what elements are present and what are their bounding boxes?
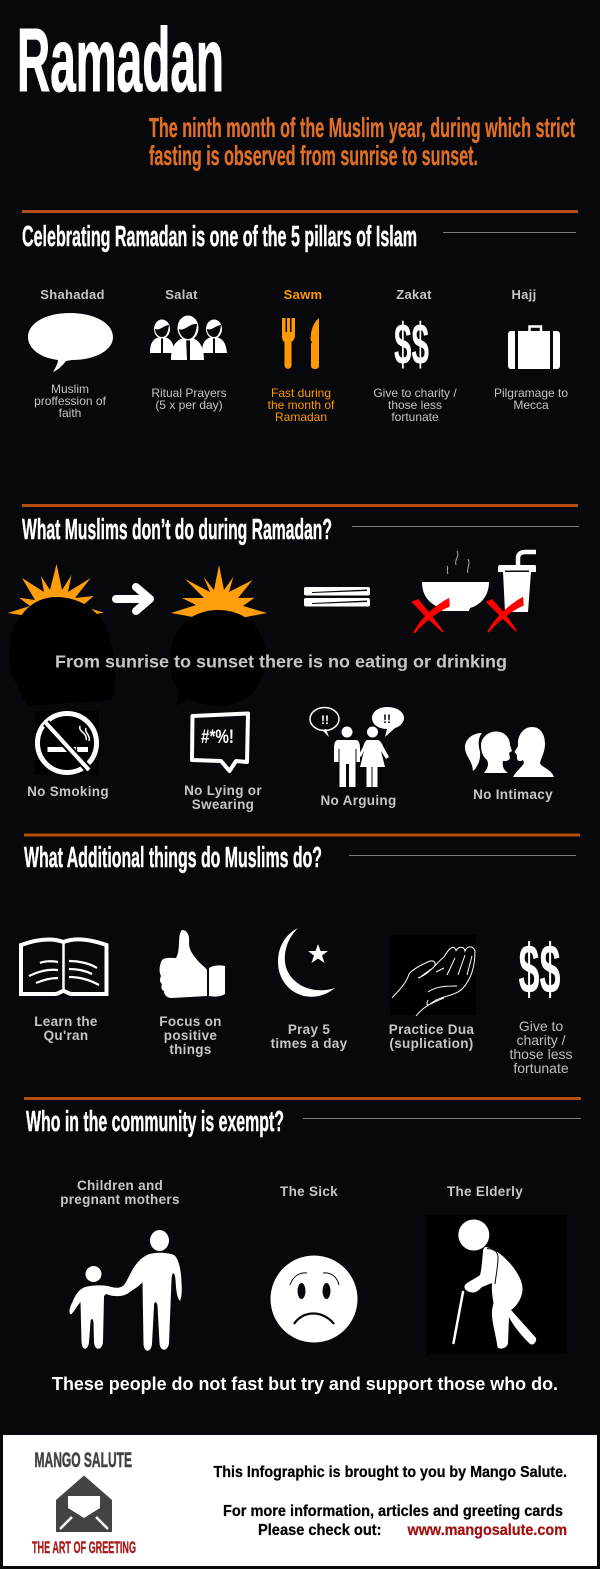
item: practice Dua <box>389 935 476 1051</box>
pillar: Zakat <box>373 287 457 424</box>
item: give to charity: charity / <box>516 1032 566 1048</box>
item: learn the Qu'ran: Learn the <box>34 1014 98 1029</box>
icon: envelope <box>56 1476 112 1532</box>
item: no lying or swearing: Swearing <box>192 797 254 812</box>
icon: speech bubble <box>28 313 113 372</box>
pillar: Salat: Salat <box>165 287 198 302</box>
logo: Mango Salute <box>32 1449 136 1557</box>
icon: dollar signs: $$ <box>394 312 429 377</box>
item: focus on positive things: Focus on <box>159 1014 222 1029</box>
icon: crescent and star <box>278 928 335 997</box>
arrow <box>116 587 150 611</box>
pillar: Zakat: Give to charity / <box>373 386 457 400</box>
item: no intimacy: No Intimacy <box>473 787 553 802</box>
heading: exempt: Who in the community is exempt? <box>26 1106 284 1138</box>
item: learn the Qu'ran <box>21 939 106 1043</box>
item: give to charity: Give to <box>519 1018 563 1034</box>
icon: rising sun <box>8 564 116 706</box>
item: focus on positive things: things <box>169 1042 212 1057</box>
icon: thumbs up <box>160 930 225 998</box>
pillar: Sawm: Sawm <box>284 287 322 302</box>
icon: crossed-out food bowl <box>412 551 489 633</box>
footer message: For more information, articles and greeting cards <box>223 1503 563 1520</box>
pillar: Sawm: the month of <box>268 398 335 412</box>
item: pray 5 times a day <box>271 928 348 1051</box>
caption: exempt support: These people do not fast but try and support those who do. <box>52 1374 558 1394</box>
item: give to charity: fortunate <box>513 1060 569 1076</box>
icon: fork and knife <box>282 318 319 369</box>
pillar: Sawm <box>268 287 335 424</box>
caption: no eating or drinking: From sunrise to sunset there is no eating or drinking <box>55 652 507 672</box>
pillar: Salat <box>150 287 227 412</box>
icon: open book <box>21 939 106 994</box>
pillar: Hajj: Mecca <box>513 398 549 412</box>
item: the elderly <box>426 1184 567 1354</box>
pillar: Shahadad: Muslim <box>51 382 89 396</box>
pillar: Zakat: those less <box>388 398 442 412</box>
item: no arguing <box>310 707 404 808</box>
panel: footer <box>3 1435 597 1566</box>
icon: equals sign <box>304 587 370 606</box>
pillar: Sawm: Fast during <box>271 386 331 400</box>
pillar: Shahadad: faith <box>59 406 81 420</box>
item: children and pregnant mothers <box>60 1178 182 1351</box>
item: pray 5 times a day: times a day <box>271 1036 348 1051</box>
logo: Mango Salute: THE ART OF GREETING <box>32 1538 136 1557</box>
item: no smoking: No Smoking <box>27 784 109 799</box>
item: the sick: The Sick <box>280 1184 338 1199</box>
item: pray 5 times a day: Pray 5 <box>288 1022 330 1037</box>
icon: no smoking sign <box>35 711 99 775</box>
pillar: Zakat: Zakat <box>396 287 432 302</box>
icon: praying hands line drawing <box>390 935 476 1016</box>
pillar: Shahadad: proffession of <box>34 394 107 408</box>
pillar: Salat: (5 x per day) <box>155 398 223 412</box>
pillar: Hajj: Hajj <box>511 287 537 302</box>
icon: suitcase <box>508 326 560 369</box>
title: Ramadan <box>17 11 224 111</box>
title block <box>17 11 575 171</box>
item: no intimacy <box>465 727 554 802</box>
item: no smoking <box>27 711 109 799</box>
icon: adult and child <box>69 1230 182 1351</box>
item: the sick <box>270 1184 358 1342</box>
item: children and pregnant mothers: Children and <box>77 1178 163 1193</box>
panel: who is exempt <box>24 1097 581 1394</box>
icon: praying people <box>150 316 227 360</box>
panel: what Muslims don't do <box>8 504 579 812</box>
pillar: Shahadad: Shahadad <box>40 287 105 302</box>
item: children and pregnant mothers: pregnant mothers <box>60 1192 180 1207</box>
pillar: Sawm: Ramadan <box>275 410 327 424</box>
icon: swearing speech box: #*%! <box>201 727 234 748</box>
pillar: Zakat: fortunate <box>391 410 439 424</box>
footer message <box>214 1464 567 1539</box>
pillar: Hajj: Pilgramage to <box>494 386 568 400</box>
icon: arguing couple <box>310 707 404 787</box>
icon: arguing couple: !! <box>383 712 391 726</box>
logo: Mango Salute: MANGO SALUTE <box>34 1449 132 1472</box>
icon: sad face <box>270 1256 358 1342</box>
icon: two head silhouettes <box>465 727 554 777</box>
pillar: Hajj <box>494 287 568 412</box>
icon: elderly person with cane <box>426 1215 567 1354</box>
heading: additional things: What Additional things do Muslims do? <box>24 842 322 874</box>
item: learn the Qu'ran: Qu'ran <box>44 1028 88 1043</box>
pillar: Shahadad <box>28 287 113 420</box>
item: the elderly: The Elderly <box>447 1184 523 1199</box>
panel: additional things <box>21 834 580 1076</box>
pillar: Salat: Ritual Prayers <box>151 386 227 400</box>
footer message: www.mangosalute.com <box>407 1522 567 1539</box>
footer message: Please check out: <box>258 1522 382 1539</box>
icon: arguing couple: !! <box>321 713 329 727</box>
item: no lying or swearing: No Lying or <box>184 783 262 798</box>
item: give to charity: those less <box>509 1046 573 1062</box>
icon: dollar signs: $$ <box>518 930 560 1008</box>
item: no arguing: No Arguing <box>321 793 396 808</box>
panel: five pillars <box>22 210 578 424</box>
item: no lying or swearing <box>184 714 262 812</box>
item: focus on positive things: positive <box>164 1028 217 1043</box>
item: practice Dua: (suplication) <box>389 1036 474 1051</box>
icon: setting sun <box>170 565 267 706</box>
icon: crossed-out drink cup <box>487 552 536 632</box>
heading: don't do: What Muslims don’t do during Ramadan? <box>22 514 332 546</box>
item: focus on positive things <box>159 930 225 1057</box>
item: give to charity <box>509 930 573 1076</box>
item: practice Dua: Practice Dua <box>389 1022 474 1037</box>
footer message: This Infographic is brought to you by Mango Salute. <box>214 1464 567 1481</box>
